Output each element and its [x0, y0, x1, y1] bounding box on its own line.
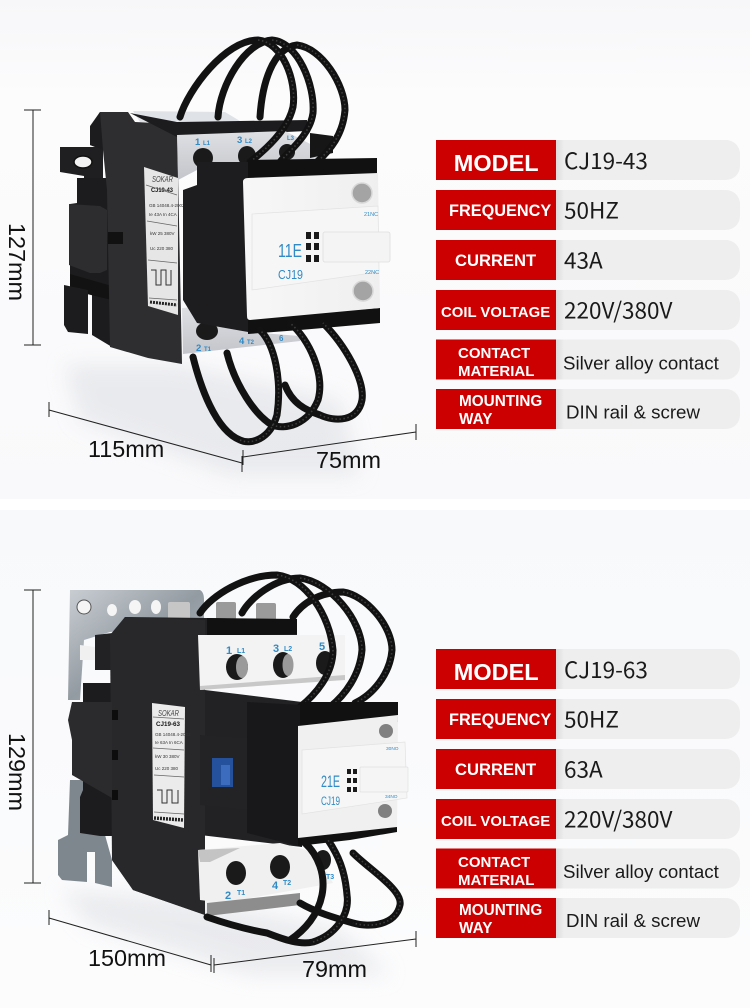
bottom terminal block: T2 [283, 880, 291, 887]
top terminal block: 3 L2 [237, 135, 253, 146]
contactor body [68, 617, 302, 915]
nameplate label: SOKAR [152, 175, 173, 184]
row: coil voltage: COIL VOLTAGE [441, 305, 550, 321]
top screws [168, 602, 276, 622]
side clip [69, 204, 107, 273]
blue test button [212, 758, 233, 787]
spec table: CJ19-63 [436, 649, 740, 938]
top terminal block: 1 [226, 645, 232, 657]
panel: CJ19-43 background [0, 0, 750, 499]
dimension: width 79mm [214, 931, 416, 982]
vent grid [347, 769, 357, 792]
bottom terminal block: 2 T1 [196, 343, 212, 354]
auxiliary contact housing [183, 158, 380, 334]
row: coil voltage: 220V/380V [564, 802, 673, 834]
metal mounting plate [58, 590, 204, 887]
floor reflection [65, 365, 360, 475]
row: mounting way: MOUNTING [459, 393, 542, 410]
row: coil voltage: 220V/380V [564, 294, 673, 326]
lower wires [193, 323, 362, 442]
mounting flange [60, 147, 103, 180]
panel: CJ19-63 background [0, 510, 750, 1008]
row: contact material [436, 848, 740, 889]
row: mounting way: MOUNTING [459, 902, 542, 919]
auxiliary contact module: 30NO [386, 746, 399, 752]
auxiliary contact module [298, 715, 408, 838]
contactor body [60, 112, 182, 364]
row: current [436, 749, 740, 789]
centre frame [200, 735, 247, 810]
dimension: depth 150mm [49, 910, 211, 972]
nameplate label [152, 703, 191, 828]
side clip [68, 702, 112, 798]
nameplate label: GB 14048.4-2002 [155, 732, 191, 737]
dimension: width 75mm [243, 424, 416, 473]
auxiliary contact module: 34NO [385, 794, 398, 800]
bottom terminal block [182, 307, 300, 354]
rear backing [70, 178, 112, 347]
row: mounting way: DIN rail & screw [566, 402, 700, 422]
row: mounting way [436, 389, 740, 429]
row: model [436, 649, 740, 689]
nameplate label: Uc 220 380 [150, 246, 174, 251]
row: contact material [436, 340, 740, 380]
top terminal block [198, 635, 345, 690]
bottom terminal block: 4 T2 [239, 336, 255, 347]
bottom terminal block: 4 [272, 880, 279, 892]
row: frequency [436, 699, 740, 739]
top terminal block: 5 [319, 641, 325, 653]
row: contact material: Silver alloy contact [563, 352, 720, 374]
bottom terminal block: T3 [326, 874, 334, 881]
spec table: CJ19-43 [436, 140, 740, 429]
auxiliary contact module: CJ19 [278, 268, 303, 282]
row: frequency: FREQUENCY [449, 202, 551, 220]
auxiliary contact module: 21E [321, 773, 340, 791]
nameplate label: GB 14048.4-2002 [149, 203, 185, 208]
row: model: MODEL [454, 659, 539, 685]
dimension: depth 115mm [49, 402, 242, 472]
bottom terminal block [198, 843, 334, 916]
row: contact material: MATERIAL [458, 363, 534, 380]
row: mounting way: WAY [459, 920, 492, 937]
dimension: width 79mm: 79mm [302, 956, 367, 982]
row: current [436, 240, 740, 280]
row: mounting way: DIN rail & screw [566, 910, 700, 931]
dimension: depth 115mm: 115mm [88, 436, 164, 462]
row: model: CJ19-63 [564, 653, 648, 685]
auxiliary contact module: CJ19 [321, 796, 340, 808]
auxiliary contact module: 22NC [365, 270, 379, 276]
floor reflection [60, 890, 390, 975]
row: mounting way: WAY [459, 411, 492, 428]
row: current: 43A [564, 244, 603, 276]
top terminal block: 3 [273, 643, 279, 655]
nameplate label: kW 25 380V [150, 231, 175, 236]
nameplate label: SOKAR [158, 709, 179, 718]
auxiliary contact module: 21NC [364, 212, 378, 218]
upper wires [180, 40, 345, 162]
row: frequency: 50HZ [564, 702, 619, 734]
row: model [436, 140, 740, 180]
row: current: 63A [564, 752, 603, 784]
nameplate label: kW 30 380V [155, 754, 180, 759]
top terminal block [130, 111, 333, 180]
dimension: height 129mm [4, 590, 41, 883]
row: contact material: CONTACT [458, 854, 530, 871]
bottom terminal block: T1 [237, 890, 245, 897]
row: coil voltage [436, 799, 740, 839]
nameplate label: Ie 43A In 4CA [149, 212, 177, 217]
dimension: width 75mm: 75mm [316, 447, 381, 473]
auxiliary contact module [243, 173, 390, 320]
nameplate label: CJ19-63 [156, 721, 180, 728]
auxiliary contact housing [247, 702, 398, 847]
row: mounting way [436, 898, 740, 938]
panel: CJ19-43 product [4, 40, 416, 475]
row: contact material: MATERIAL [458, 872, 534, 889]
row: frequency: FREQUENCY [449, 711, 551, 729]
row: coil voltage: COIL VOLTAGE [441, 814, 550, 830]
top terminal block: L2 [284, 646, 292, 653]
top terminal block: 1 L1 [195, 137, 211, 148]
nameplate label: Uc 220 380 [155, 766, 179, 771]
row: frequency [436, 190, 740, 230]
top terminal block: L1 [237, 648, 245, 655]
row: contact material: Silver alloy contact [563, 861, 720, 882]
dimension: height 127mm: 127mm [4, 223, 30, 301]
row: contact material: CONTACT [458, 345, 530, 362]
terminal fins [207, 618, 297, 636]
nameplate label: Ie 63A In 6CA [155, 740, 183, 745]
nameplate label: CJ19-43 [151, 187, 173, 194]
lower wires [207, 840, 400, 943]
row: coil voltage [436, 290, 740, 330]
row: current: CURRENT [455, 251, 536, 270]
panel: CJ19-63 product [4, 575, 416, 982]
dimension: depth 150mm: 150mm [88, 945, 166, 971]
nameplate label [144, 167, 185, 315]
vent grid [306, 232, 319, 262]
row: frequency: 50HZ [564, 194, 619, 226]
row: current: CURRENT [455, 760, 536, 779]
dimension: height 127mm [4, 110, 41, 345]
row: model: MODEL [454, 150, 539, 176]
upper wires [200, 575, 392, 707]
top terminal block: L3 [287, 136, 295, 142]
bottom terminal block: 2 [225, 890, 231, 902]
dimension: height 129mm: 129mm [4, 733, 30, 811]
row: model: CJ19-43 [564, 144, 648, 176]
auxiliary contact module: 11E [278, 241, 302, 261]
bottom terminal block: 6 [279, 334, 284, 343]
